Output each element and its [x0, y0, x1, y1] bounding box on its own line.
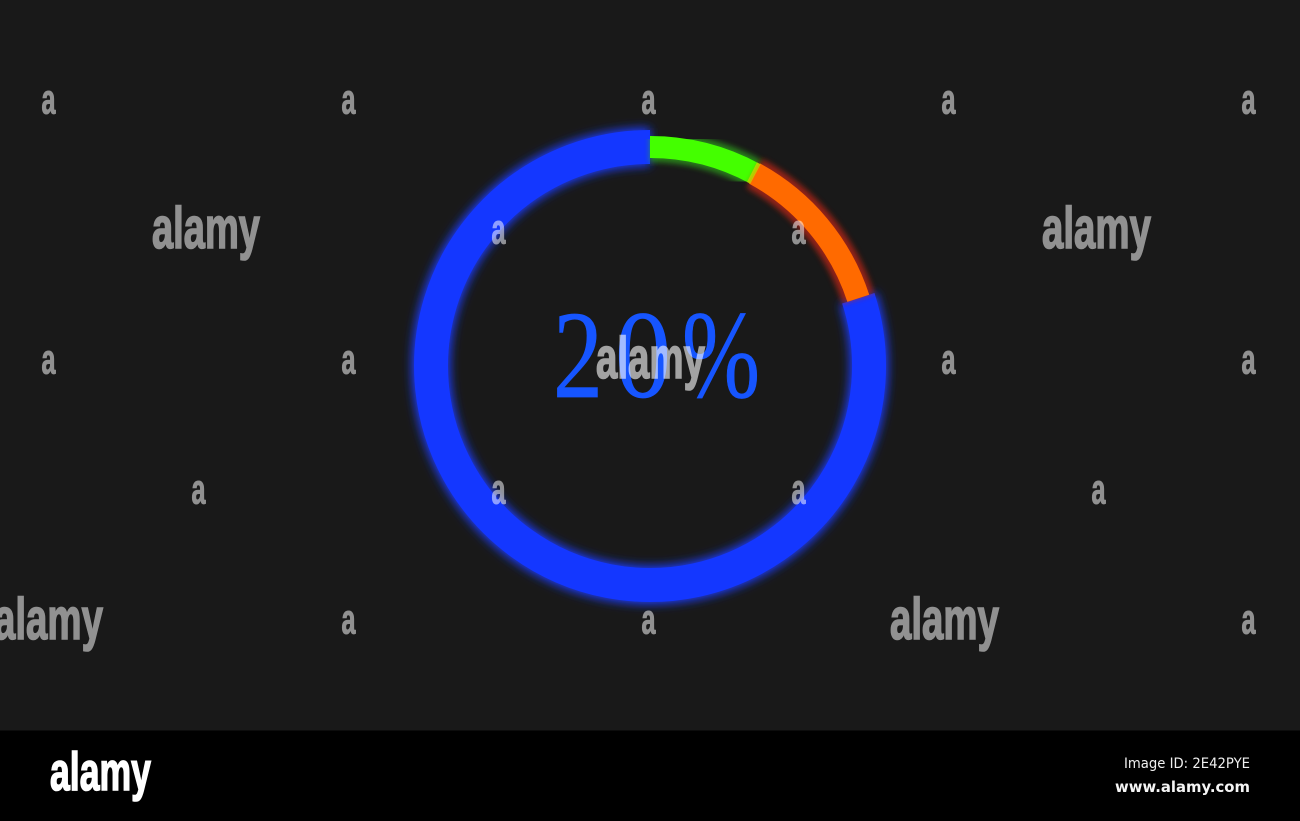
watermark row 2 [152, 196, 1151, 261]
percentage value [553, 287, 760, 425]
watermark row 2: alamy [1042, 196, 1151, 261]
watermark row 3: a [42, 336, 56, 382]
donut progress ring [431, 147, 869, 585]
watermark row 5: a [1242, 596, 1256, 642]
center watermark: alamy [596, 326, 705, 391]
watermark row 5: alamy [890, 587, 999, 652]
percentage value: 2 [553, 287, 603, 425]
watermark row 3: a [1242, 336, 1256, 382]
watermark row 5: a [342, 596, 356, 642]
watermark row 3: a [942, 336, 956, 382]
watermark row 2: alamy [152, 196, 260, 261]
watermark row 2: a [492, 206, 506, 252]
watermark row 4: a [192, 466, 206, 512]
blue remainder arc [431, 147, 869, 585]
watermark row 1: a [1242, 76, 1256, 122]
watermark row 3 [42, 336, 1256, 382]
watermark row 5 [0, 587, 1256, 652]
footer bar [0, 730, 1300, 821]
watermark row 1: a [642, 76, 656, 122]
watermark row 4: a [492, 466, 506, 512]
footer logo: alamy [50, 742, 151, 802]
watermark row 4 [192, 466, 1106, 512]
watermark row 1 [42, 76, 1256, 122]
orange progress segment [752, 172, 858, 298]
watermark row 4: a [792, 466, 806, 512]
image id: Image ID: 2E42PYE [1124, 756, 1250, 772]
watermark row 3: a [342, 336, 356, 382]
watermark row 1: a [342, 76, 356, 122]
website: www.alamy.com [1115, 778, 1250, 796]
watermark row 1: a [942, 76, 956, 122]
watermark row 5: a [642, 596, 656, 642]
watermark row 1: a [42, 76, 56, 122]
percentage value: % [682, 287, 760, 425]
percentage value: 0 [615, 287, 671, 425]
watermark grid [0, 76, 1256, 652]
watermark row 4: a [1092, 466, 1106, 512]
watermark row 2: a [792, 206, 806, 252]
green progress segment [650, 147, 754, 174]
